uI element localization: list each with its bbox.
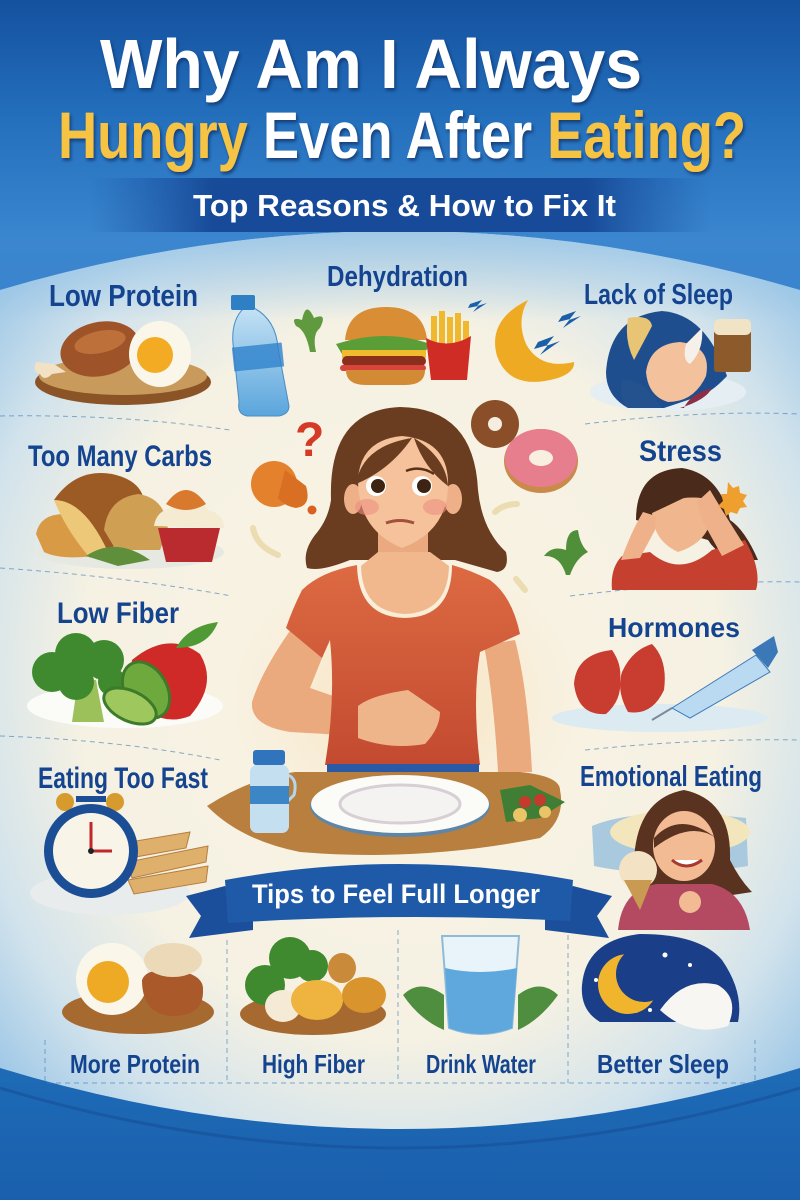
icon: donut chocolate	[471, 400, 519, 448]
icon: woman eating ice cream	[592, 790, 752, 930]
arms	[621, 512, 656, 560]
icon: egg and meatball on board	[62, 943, 214, 1034]
panel: top blue haze	[0, 231, 800, 320]
waistband	[327, 764, 479, 775]
illustration: table with plate	[207, 750, 565, 855]
face	[358, 436, 448, 548]
label: eating too fast: Eating Too Fast	[38, 762, 208, 795]
tip: high fiber	[240, 937, 386, 1079]
icon: water glass with herbs	[403, 936, 558, 1034]
panel: cream central area	[0, 231, 800, 1129]
subtitle banner: Top Reasons & How to Fix It	[193, 188, 616, 223]
icon: burger	[336, 307, 430, 385]
icon: bread and muffin	[36, 473, 224, 569]
tip: more protein: More Protein	[70, 1049, 200, 1079]
label: dehydration: Dehydration	[327, 261, 468, 293]
icon: floating herb	[544, 530, 588, 575]
title line 2: Hungry Even After Eating?	[58, 98, 746, 172]
section dividers	[0, 413, 800, 1083]
icon: thyroid and syringe	[552, 636, 778, 732]
icon: crescent moon and lightning	[468, 300, 581, 382]
shirt	[612, 540, 758, 590]
salad	[500, 785, 565, 822]
ribbon: tips: Tips to Feel Full Longer	[252, 879, 540, 909]
icon: chicken and egg on plate	[35, 314, 211, 405]
chest skin	[361, 552, 449, 614]
ribbon: tips	[186, 864, 612, 938]
icon: floating chicken drumstick	[251, 461, 316, 514]
label: hormones: Hormones	[608, 612, 740, 643]
label: lack of sleep: Lack of Sleep	[584, 279, 733, 311]
label: low protein: Low Protein	[49, 278, 198, 313]
title	[58, 25, 746, 172]
face	[652, 498, 712, 552]
tip: high fiber: High Fiber	[262, 1049, 365, 1079]
subtitle banner	[90, 178, 710, 232]
icon: stressed woman	[612, 468, 758, 590]
icon: parsley leaf	[294, 309, 323, 352]
hair back	[306, 407, 507, 572]
label: low fiber: Low Fiber	[57, 597, 179, 630]
shirt	[286, 565, 520, 765]
icon: sleepy woman with mug	[590, 311, 751, 411]
left arm	[252, 628, 362, 736]
label: stress: Stress	[639, 435, 722, 468]
small water jar	[250, 750, 295, 833]
neck	[378, 530, 428, 574]
icon: alarm clock and toast	[30, 793, 208, 915]
right arm	[484, 640, 532, 772]
icon: water bottle	[231, 295, 289, 416]
tip: drink water: Drink Water	[426, 1049, 536, 1079]
icon: donut pink	[504, 429, 578, 493]
label: too many carbs: Too Many Carbs	[28, 440, 212, 473]
tip: more protein	[62, 943, 214, 1079]
tip: better sleep	[582, 934, 739, 1079]
icon: fries	[426, 311, 471, 380]
hair	[636, 468, 758, 560]
icon: vegetables on board	[240, 937, 386, 1035]
icon: question mark: ?	[295, 414, 324, 467]
tip: drink water	[403, 936, 558, 1079]
title line 1: Why Am I Always	[100, 25, 642, 103]
icon: broccoli, cucumber, apple	[27, 622, 223, 731]
illustration: woman	[225, 407, 585, 850]
hand	[358, 690, 440, 746]
burst	[718, 482, 747, 516]
icon: moon on pillow	[582, 934, 739, 1030]
tip: better sleep: Better Sleep	[597, 1049, 729, 1079]
icon: floating snacks	[253, 504, 525, 590]
ears	[344, 484, 362, 514]
